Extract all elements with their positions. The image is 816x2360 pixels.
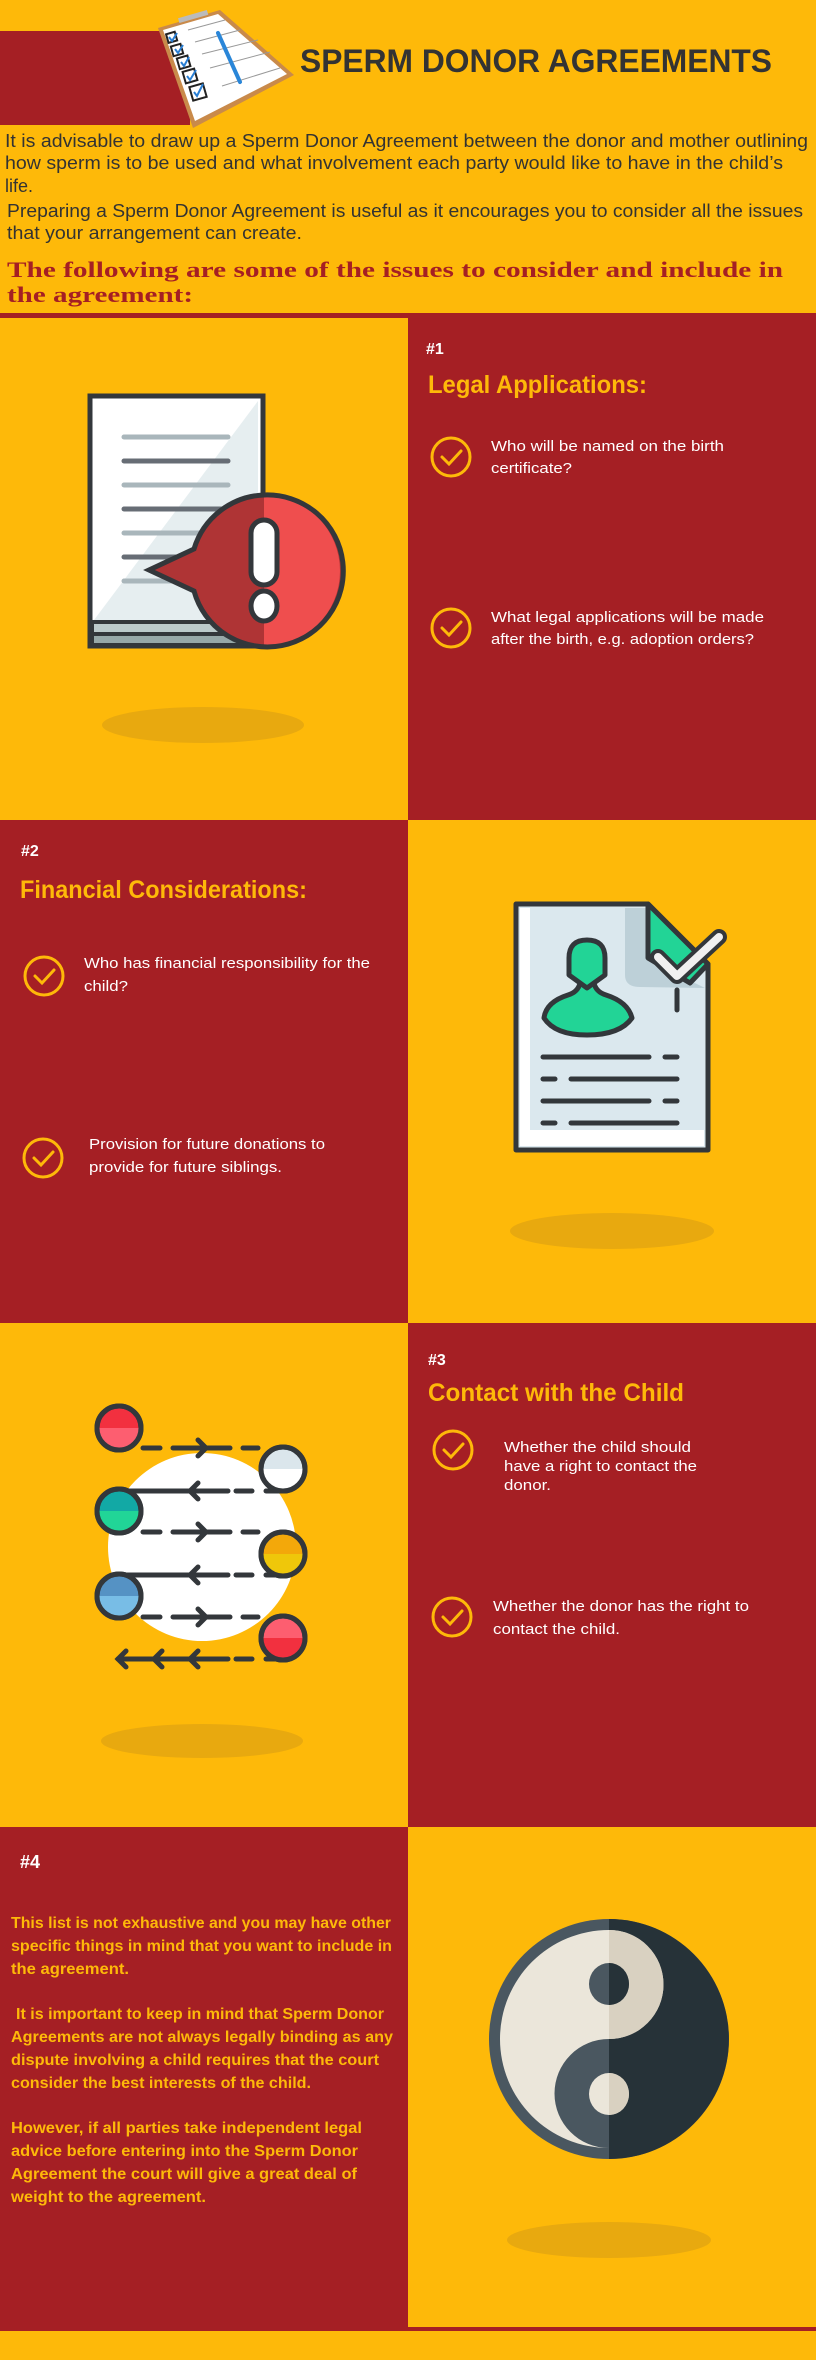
- panel: #3 contact with the child: contact the child.: [493, 1621, 620, 1638]
- panel: #4 conclusion: weight to the agreement.: [10, 2189, 206, 2206]
- panel: #1 legal applications: [408, 316, 816, 820]
- panel: #4 conclusion: the agreement.: [11, 1961, 129, 1978]
- panel: #3 contact with the child: Whether the donor has the right to: [493, 1598, 749, 1615]
- panel: #1 legal applications: #1: [426, 341, 444, 358]
- panel: #2 financial considerations: Financial Considerations:: [20, 876, 307, 904]
- panel: #4 conclusion: It is important to keep in mind that Sperm Donor: [16, 2006, 384, 2023]
- panel: #1 legal applications: Who will be named on the birth: [491, 438, 724, 455]
- title: SPERM DONOR AGREEMENTS: [300, 43, 772, 79]
- intro text: life.: [5, 176, 33, 196]
- panel: #4 conclusion: consider the best interests of the child.: [11, 2075, 311, 2092]
- intro text: how sperm is to be used and what involvement each party would like to have in the child’s: [5, 153, 783, 173]
- panel: #4 conclusion: specific things in mind that you want to include in: [11, 1938, 392, 1955]
- icon: clipboard: [158, 10, 294, 128]
- panel: #2 financial considerations: provide for future siblings.: [89, 1159, 282, 1176]
- panel: #3 contact with the child: have a right to contact the: [504, 1458, 697, 1475]
- panel: #1 legal applications: after the birth, e.g. adoption orders?: [491, 631, 754, 648]
- panel: #4 conclusion: #4: [20, 1852, 40, 1872]
- panel: #4 conclusion: This list is not exhaustive and you may have other: [11, 1915, 391, 1932]
- panel: #3 contact with the child: donor.: [504, 1477, 551, 1494]
- icon: document with alert: [90, 396, 343, 743]
- panel: #4 conclusion: advice before entering into the Sperm Donor: [11, 2143, 358, 2160]
- intro text: It is advisable to draw up a Sperm Donor Agreement between the donor and mother outlining: [5, 131, 808, 151]
- panel: #1 legal applications: Legal Applications:: [428, 371, 647, 399]
- subheading: [7, 257, 783, 307]
- intro text: [5, 131, 808, 243]
- icon: yin yang: [489, 1919, 729, 2258]
- panel: #2 financial considerations: child?: [84, 978, 128, 995]
- subheading: The following are some of the issues to consider and include in: [7, 257, 783, 282]
- panel: #2 financial considerations: Who has financial responsibility for the: [84, 955, 370, 972]
- panel: #3 contact with the child: Contact with the Child: [428, 1379, 684, 1407]
- panel: #4 conclusion: Agreement the court will give a great deal of: [11, 2166, 358, 2183]
- panel: #3 contact with the child: [408, 1323, 816, 1827]
- panel: #1 legal applications: What legal applications will be made: [491, 609, 764, 626]
- panel: #3 contact with the child: Whether the child should: [504, 1439, 691, 1456]
- icon: profile document with check: [510, 904, 719, 1249]
- panel: #3 contact with the child: #3: [428, 1352, 446, 1369]
- header red band: [0, 31, 190, 125]
- panel: #4 conclusion: However, if all parties take independent legal: [11, 2120, 362, 2137]
- panel: #4 conclusion: [0, 1827, 408, 2327]
- intro text: Preparing a Sperm Donor Agreement is useful as it encourages you to consider all the issues: [7, 201, 803, 221]
- panel: #1 legal applications: certificate?: [491, 460, 572, 477]
- intro text: that your arrangement can create.: [7, 223, 302, 243]
- panel: #4 conclusion: Agreements are not always legally binding as any: [11, 2029, 393, 2046]
- icon: contact exchange arrows: [97, 1406, 305, 1758]
- subheading: the agreement:: [7, 282, 193, 307]
- panel: #2 financial considerations: Provision for future donations to: [89, 1136, 325, 1153]
- panel: #2 financial considerations: [0, 820, 408, 1323]
- panel: #2 financial considerations: #2: [21, 843, 39, 860]
- panel: #4 conclusion: dispute involving a child requires that the court: [11, 2052, 380, 2069]
